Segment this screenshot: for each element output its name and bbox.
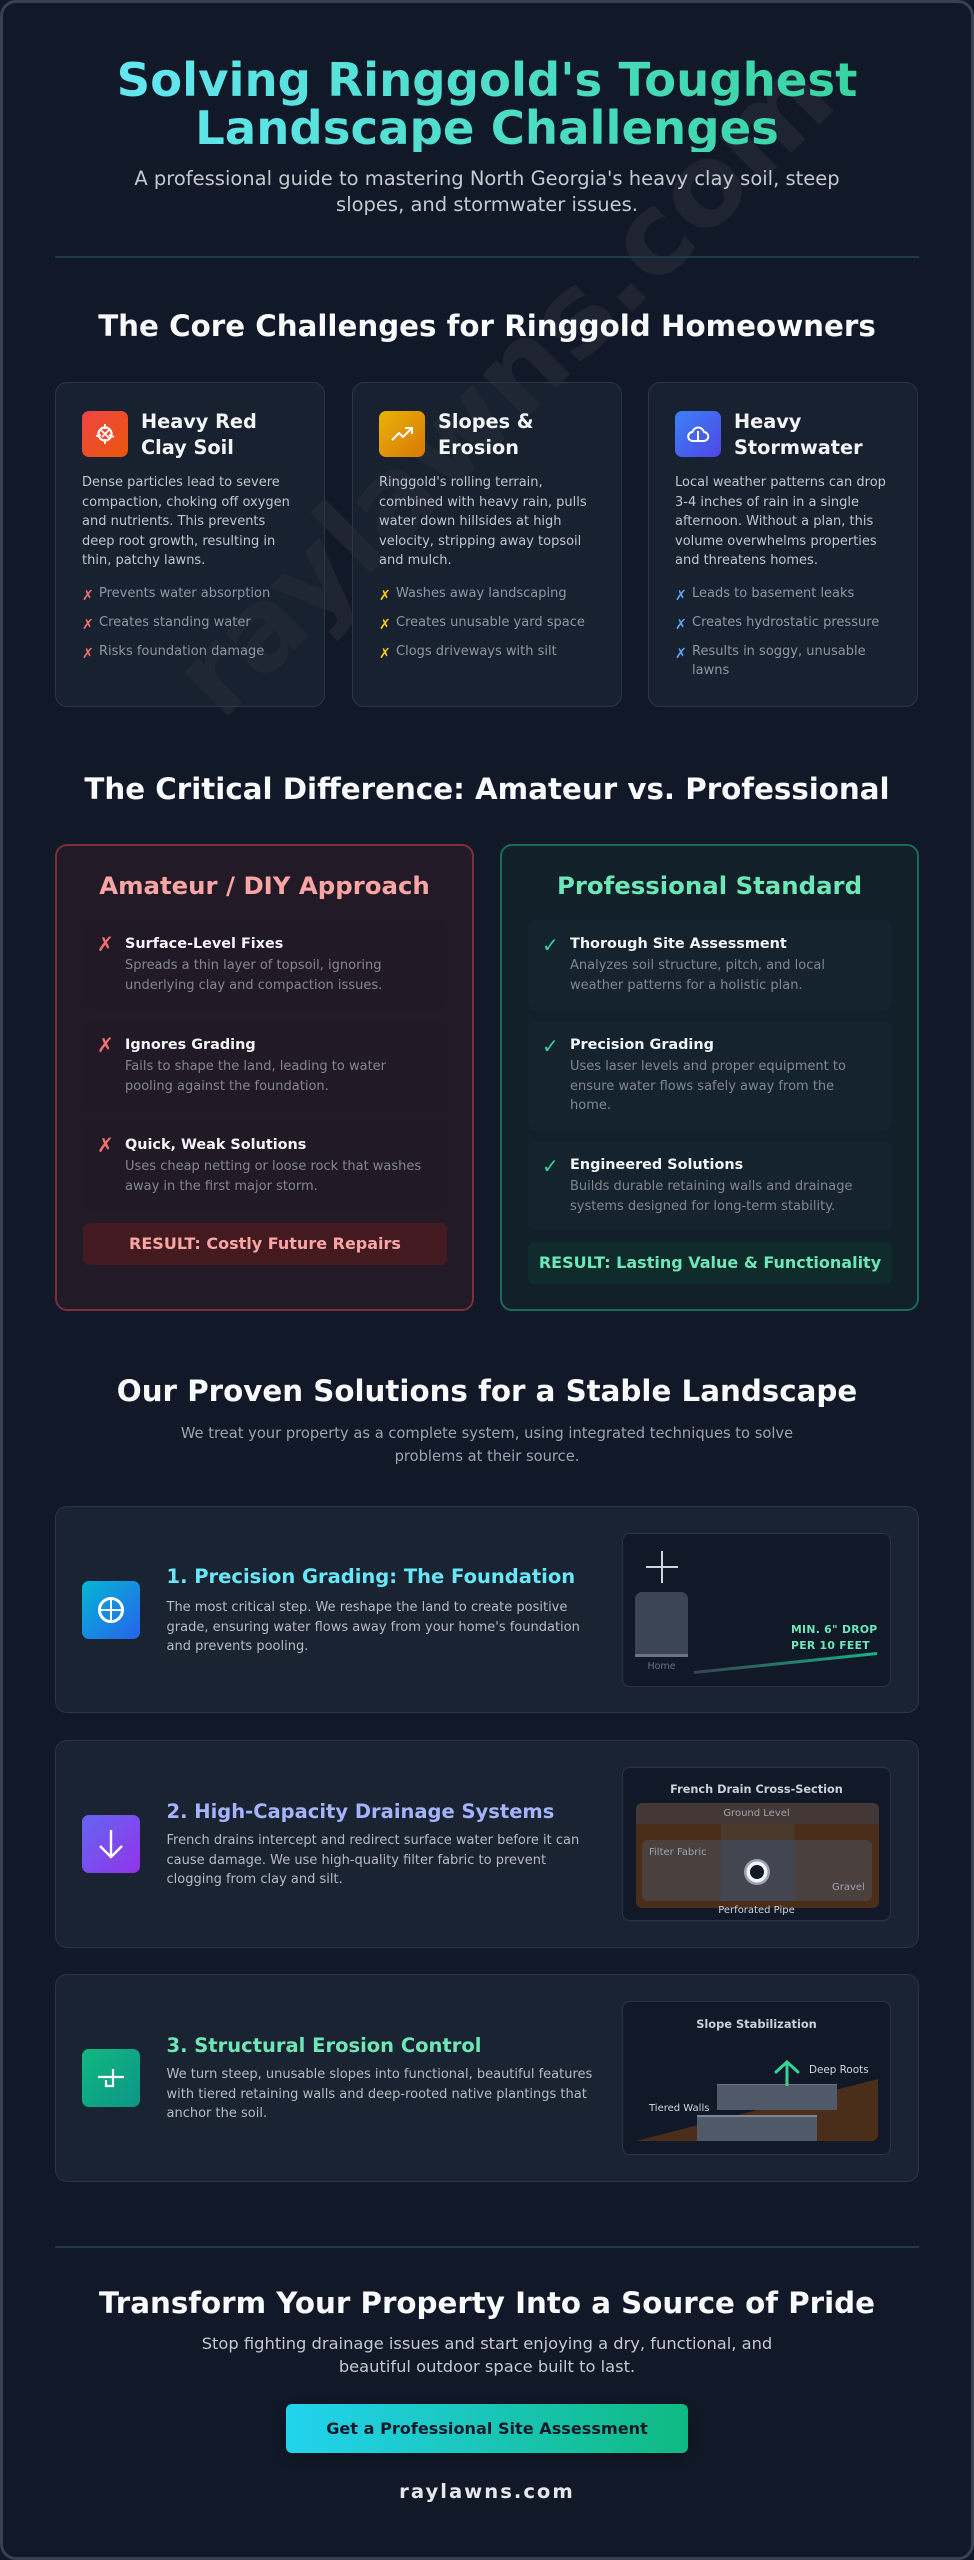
item: engineered solutions: systems designed for long-term stability. [570,1198,835,1214]
icon: trending up [379,411,425,457]
solution 2: drainage [55,1740,919,1948]
solution heading: 2. High-Capacity Drainage Systems [166,1800,554,1823]
bullet list: ✗ [82,617,94,633]
solution text: clogging from clay and silt. [166,1872,343,1887]
bullet list: Leads to basement leaks [692,586,854,601]
bullet list: Risks foundation damage [99,644,264,659]
result: costly repairs: RESULT: Costly Future Repairs [129,1234,401,1253]
solution text: French drains intercept and redirect surface water before it can [166,1833,579,1848]
heading: proven solutions: Our Proven Solutions for a Stable Landscape [117,1374,857,1408]
pipe label: Perforated Pipe [718,1905,795,1916]
card description: and threatens homes. [675,553,818,568]
heading: call to action: Transform Your Property Into a Source of Pride [99,2286,875,2320]
icon: grading target [82,1581,140,1639]
grade line [694,1652,877,1674]
card description: velocity, stripping away topsoil [379,534,581,548]
item: ignores grading: Fails to shape the land, leading to water [125,1059,386,1074]
button [286,2404,688,2453]
card description: and mulch. [379,553,452,568]
item: precision grading: Uses laser levels and proper equipment to [570,1059,846,1074]
ground band [636,1803,879,1824]
item: engineered solutions: ✓ [542,1154,559,1178]
item: ignores grading: Ignores Grading [125,1037,256,1053]
solution text [166,1833,579,1887]
panel heading: Amateur / DIY Approach [99,871,430,900]
roots label: Deep Roots [809,2064,869,2076]
gravel label: Gravel [832,1882,865,1893]
item: surface-level fixes [83,920,447,1010]
bullet list: Creates hydrostatic pressure [692,615,879,630]
card description: Ringgold's rolling terrain, [379,475,543,490]
card heading [438,410,534,459]
panel: heavy stormwater [648,382,918,707]
item: quick weak solutions: Uses cheap netting or loose rock that washes [125,1159,421,1174]
item: engineered solutions [528,1141,892,1231]
solution text: anchor the soil. [166,2106,267,2121]
filter fabric [642,1840,872,1901]
panel: professional standard [500,844,919,1311]
diagram title: French Drain Cross-Section [670,1783,843,1796]
bullet list: ✗ [82,646,94,662]
diagram: grading slope [622,1533,891,1687]
card description: 3-4 inches of rain in a single [675,494,859,510]
card description: Local weather patterns can drop [675,475,886,490]
diagram: slope stabilization [622,2001,891,2155]
trench [721,1824,794,1840]
item: engineered solutions: Engineered Solutions [570,1157,743,1173]
bullet list: ✗ [675,617,687,633]
card heading: Stormwater [734,436,863,459]
drop label: PER 10 FEET [791,1639,870,1652]
card description: water down hillsides at high [379,514,562,529]
bullet list: ✗ [379,646,391,662]
solution text: The most critical step. We reshape the land to create positive [166,1600,567,1615]
bullet list: Creates standing water [99,615,251,630]
result: costly repairs [83,1223,447,1265]
button: Get a Professional Site Assessment [326,2419,648,2438]
card description [675,475,886,568]
card description [82,475,290,568]
bullet list [675,586,879,678]
bullet list: ✗ [82,588,94,604]
solution 1: precision grading [55,1506,919,1713]
home block [635,1592,688,1657]
item: quick weak solutions [83,1121,447,1211]
item: precision grading: home. [570,1098,611,1113]
bullet list [82,586,270,662]
diagram title: Slope Stabilization [696,2017,817,2031]
watermark: raylawns.com [147,30,859,742]
fabric label: Filter Fabric [649,1847,707,1858]
solution text: cause damage. We use high-quality filter fabric to prevent [166,1852,546,1868]
solution text: and prevents pooling. [166,1639,308,1654]
card description: volume overwhelms properties [675,534,877,548]
card description: combined with heavy rain, pulls [379,494,587,510]
icon: cloud [675,411,721,457]
bullet list [379,586,585,662]
card description: compaction, choking off oxygen [82,494,290,510]
soil slope [636,2079,878,2141]
item: surface-level fixes: Surface-Level Fixes [125,936,283,952]
item: precision grading: ✓ [542,1034,559,1058]
solution heading: 1. Precision Grading: The Foundation [166,1565,575,1588]
panel: amateur approach [55,844,474,1311]
section intro: problems at their source. [395,1448,579,1465]
closing text [202,2334,772,2376]
subtitle: A professional guide to mastering North Georgia's heavy clay soil, steep [134,167,840,190]
item: site assessment [528,920,892,1010]
closing text: Stop fighting drainage issues and start enjoying a dry, functional, and [202,2334,772,2353]
bullet list: Results in soggy, unusable [692,644,866,659]
solution text [166,2067,592,2121]
item: surface-level fixes: Spreads a thin layer of topsoil, ignoring [125,958,382,973]
bullet list: Washes away landscaping [396,586,567,601]
card heading: Heavy [734,410,801,433]
panel heading: Professional Standard [557,871,862,900]
home label: Home [647,1661,676,1672]
item: quick weak solutions: Quick, Weak Solutions [125,1137,306,1153]
item: ignores grading: ✗ [97,1033,114,1057]
panel: slopes and erosion [352,382,622,707]
title: Solving Ringgold's Toughest [117,53,857,107]
item: quick weak solutions: ✗ [97,1133,114,1157]
subtitle: slopes, and stormwater issues. [336,193,638,216]
lower wall [697,2115,817,2141]
panel: heavy red clay soil [55,382,325,707]
ground label: Ground Level [723,1808,790,1819]
soil block [636,1803,879,1908]
icon: down arrow [82,1815,140,1873]
solution text: We turn steep, unusable slopes into functional, beautiful features [166,2067,592,2082]
card heading: Clay Soil [141,436,234,459]
item: site assessment: Analyzes soil structure, pitch, and local [570,958,825,973]
perforated pipe [744,1859,770,1885]
closing text: beautiful outdoor space built to last. [339,2357,635,2376]
solution 3: erosion control [55,1974,919,2182]
section intro: We treat your property as a complete system, using integrated techniques to solve [181,1425,793,1442]
bullet list: Prevents water absorption [99,586,270,601]
item: engineered solutions: Builds durable retaining walls and drainage [570,1179,852,1194]
card description: and nutrients. This prevents [82,514,265,529]
gravel [721,1840,794,1901]
upper wall [717,2084,837,2110]
bullet list: ✗ [675,646,687,662]
result: lasting value [528,1242,892,1284]
item: surface-level fixes: ✗ [97,932,114,956]
card heading: Slopes & [438,410,534,433]
bullet list: ✗ [379,588,391,604]
card description: Dense particles lead to severe [82,475,280,490]
solution text [166,1600,580,1654]
title [55,56,919,152]
solution text: with tiered retaining walls and deep-rooted native plantings that [166,2086,587,2102]
icon: clay soil [82,411,128,457]
heading: critical difference: The Critical Difference: Amateur vs. Professional [84,772,890,806]
section intro [181,1425,793,1465]
icon: anchor [82,2049,140,2107]
card description [379,475,587,568]
bullet list: ✗ [675,588,687,604]
root arrow [774,2060,800,2086]
heading: core challenges: The Core Challenges for Ringgold Homeowners [98,309,876,343]
icon: crosshair [646,1551,678,1583]
item: site assessment: weather patterns for a holistic plan. [570,978,803,992]
item: precision grading [528,1021,892,1130]
result: lasting value: RESULT: Lasting Value & Functionality [539,1253,881,1272]
item: ignores grading: pooling against the foundation. [125,1078,329,1094]
walls label: Tiered Walls [649,2103,709,2114]
subtitle [134,167,840,216]
item: precision grading: ensure water flows safely away from the [570,1078,834,1094]
drop label: MIN. 6" DROP [791,1623,878,1636]
card description: deep root growth, resulting in [82,534,275,548]
bullet list: ✗ [379,617,391,633]
card heading: Erosion [438,436,519,459]
diagram: french drain [622,1767,891,1921]
solution text: grade, ensuring water flows away from your home's foundation [166,1620,580,1634]
item: site assessment: ✓ [542,933,559,957]
item: quick weak solutions: away in the first major storm. [125,1178,318,1194]
card description: afternoon. Without a plan, this [675,514,873,529]
card heading [734,410,863,459]
item: site assessment: Thorough Site Assessment [570,936,787,952]
title: Landscape Challenges [195,101,779,155]
item: ignores grading [83,1021,447,1111]
drop label [791,1623,878,1652]
card description: thin, patchy lawns. [82,553,205,568]
bullet list: Clogs driveways with silt [396,644,557,659]
card heading: Heavy Red [141,410,257,433]
footer brand: raylawns.com [399,2480,575,2503]
item: surface-level fixes: underlying clay and compaction issues. [125,978,382,992]
bullet list: lawns [692,663,729,678]
solution heading: 3. Structural Erosion Control [166,2034,481,2057]
card heading [141,410,257,459]
item: precision grading: Precision Grading [570,1037,714,1053]
bullet list: Creates unusable yard space [396,615,585,630]
